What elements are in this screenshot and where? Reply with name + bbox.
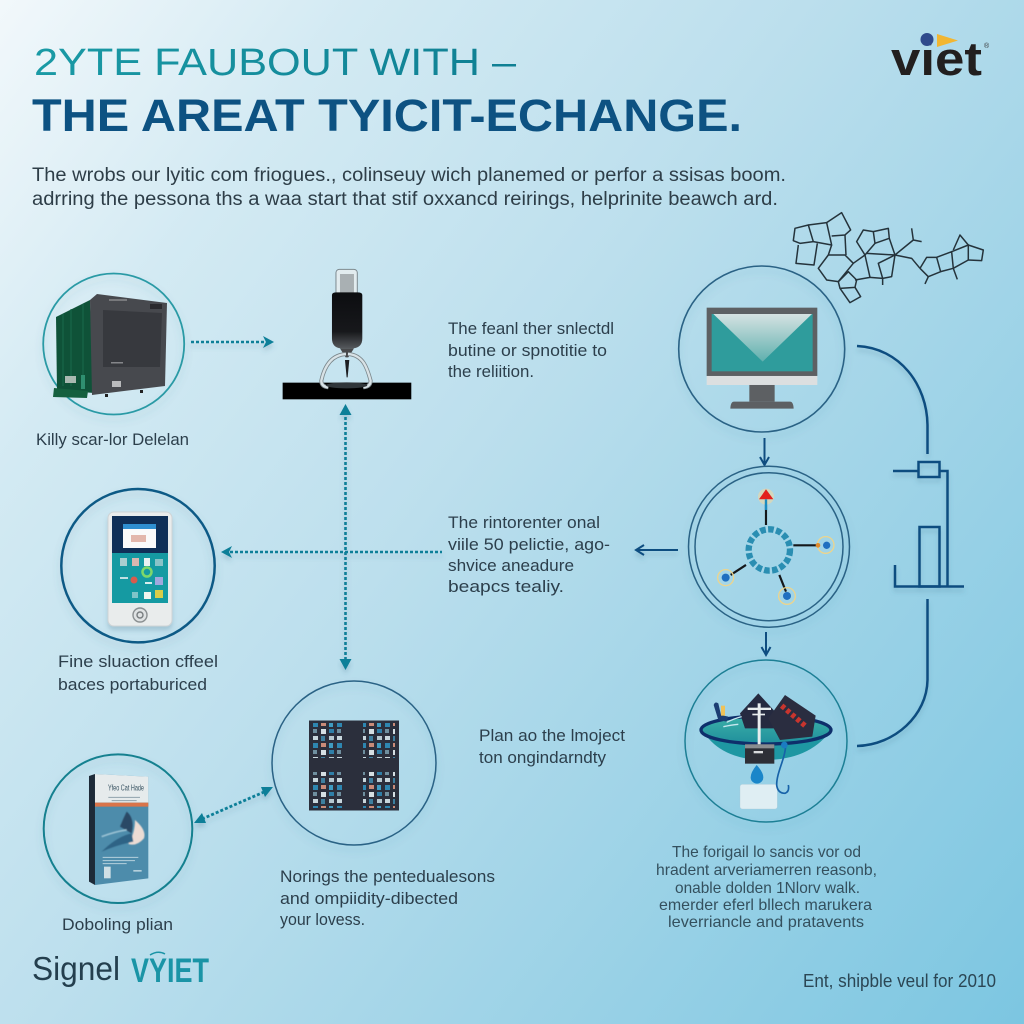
intro text (32, 165, 786, 210)
text block: top middle: The feanl ther snlectdl (448, 319, 614, 338)
arrow: horizontal dotted arrow (221, 546, 442, 558)
arrow: book to chip grid (194, 787, 273, 823)
footer note: Ent, shipble veul for 2010 (803, 971, 996, 991)
caption: basin: emerder eferl bllech marukera (659, 897, 872, 914)
title line two: THE AREAT TYICIT-ECHANGE. (32, 90, 742, 141)
footer logo: Signel VYIET: Signel (32, 950, 120, 987)
connector: text to monitor (634, 348, 668, 350)
panel: handheld device (58, 489, 218, 694)
footer logo: Signel VYIET: VYIET (131, 952, 209, 990)
icon: basin scene (701, 693, 831, 809)
icon: chip grid (309, 720, 399, 810)
arrow: node icon to text (636, 545, 678, 555)
logo: viet: ® (984, 42, 990, 50)
caption: basin: leverriancle and pratavents (668, 914, 864, 931)
text block: lower middle (479, 726, 625, 767)
icon: microscope instrument (283, 269, 411, 399)
panel: book (44, 754, 192, 934)
footer logo: Signel VYIET (32, 950, 209, 990)
title line one: 2YTE FAUBOUT WITH – (34, 42, 517, 84)
caption: chip grid: and ompiidity-dibected (280, 889, 458, 908)
panel: basin (656, 660, 877, 931)
icon: book: Yfeo Cat Hade (108, 784, 144, 793)
text block: lower middle: Plan ao the lmoject (479, 726, 625, 745)
caption: handheld: Fine sluaction cffeel (58, 652, 218, 671)
molecule diagram (793, 213, 983, 303)
text block: top middle: the reliition. (448, 362, 534, 381)
caption: chip grid: your lovess. (280, 910, 365, 929)
right side circuit diagram (857, 346, 964, 746)
caption: book: Doboling plian (62, 915, 173, 934)
connector: text to basin (640, 744, 678, 746)
text block: top middle: butine or spnotitie to (448, 341, 607, 360)
logo: viet: viet (891, 32, 982, 85)
text block: center middle: viile 50 pelictie, ago- (448, 535, 610, 554)
icon: node network (718, 489, 834, 604)
arrow: printer to microscope (191, 336, 274, 348)
text block: top middle (448, 319, 614, 381)
panel: monitor (679, 266, 845, 432)
caption: handheld: baces portaburiced (58, 675, 207, 694)
icon: printer (53, 294, 167, 398)
caption: basin (656, 844, 877, 931)
icon: monitor (707, 308, 817, 409)
caption: chip grid: Norings the pentedualesons (280, 867, 495, 886)
arrow: monitor to nodes (760, 438, 769, 465)
arrow: vertical dotted double arrow (340, 404, 352, 670)
caption: handheld (58, 652, 218, 694)
arrow: nodes to basin (762, 632, 770, 655)
icon: book (89, 774, 148, 885)
panel: node network (688, 466, 850, 627)
caption: chip grid (280, 867, 495, 929)
caption: basin: hradent arveriamerren reasonb, (656, 862, 877, 879)
caption: printer: Killy scar-lor Delelan (36, 430, 189, 449)
text block: center middle: The rintorenter onal (448, 513, 600, 532)
icon: phone (108, 512, 172, 626)
intro text: adrring the pessona ths a waa start that stif oxxancd reirings, helprinite beawch ard. (32, 189, 778, 210)
panel: chip grid (272, 681, 495, 929)
panel: printer device (36, 274, 189, 449)
caption: basin: The forigail lo sancis vor od (672, 844, 861, 861)
text block: center middle (448, 513, 610, 596)
text block: lower middle: ton ongindarndty (479, 748, 606, 767)
text block: center middle: shvice aneadure (448, 556, 574, 575)
text block: center middle: beapcs tealiy. (448, 577, 564, 596)
intro text: The wrobs our lyitic com friogues., colinseuy wich planemed or perfor a ssisas boom. (32, 165, 786, 186)
caption: basin: onable dolden 1Nlorv walk. (675, 880, 860, 897)
